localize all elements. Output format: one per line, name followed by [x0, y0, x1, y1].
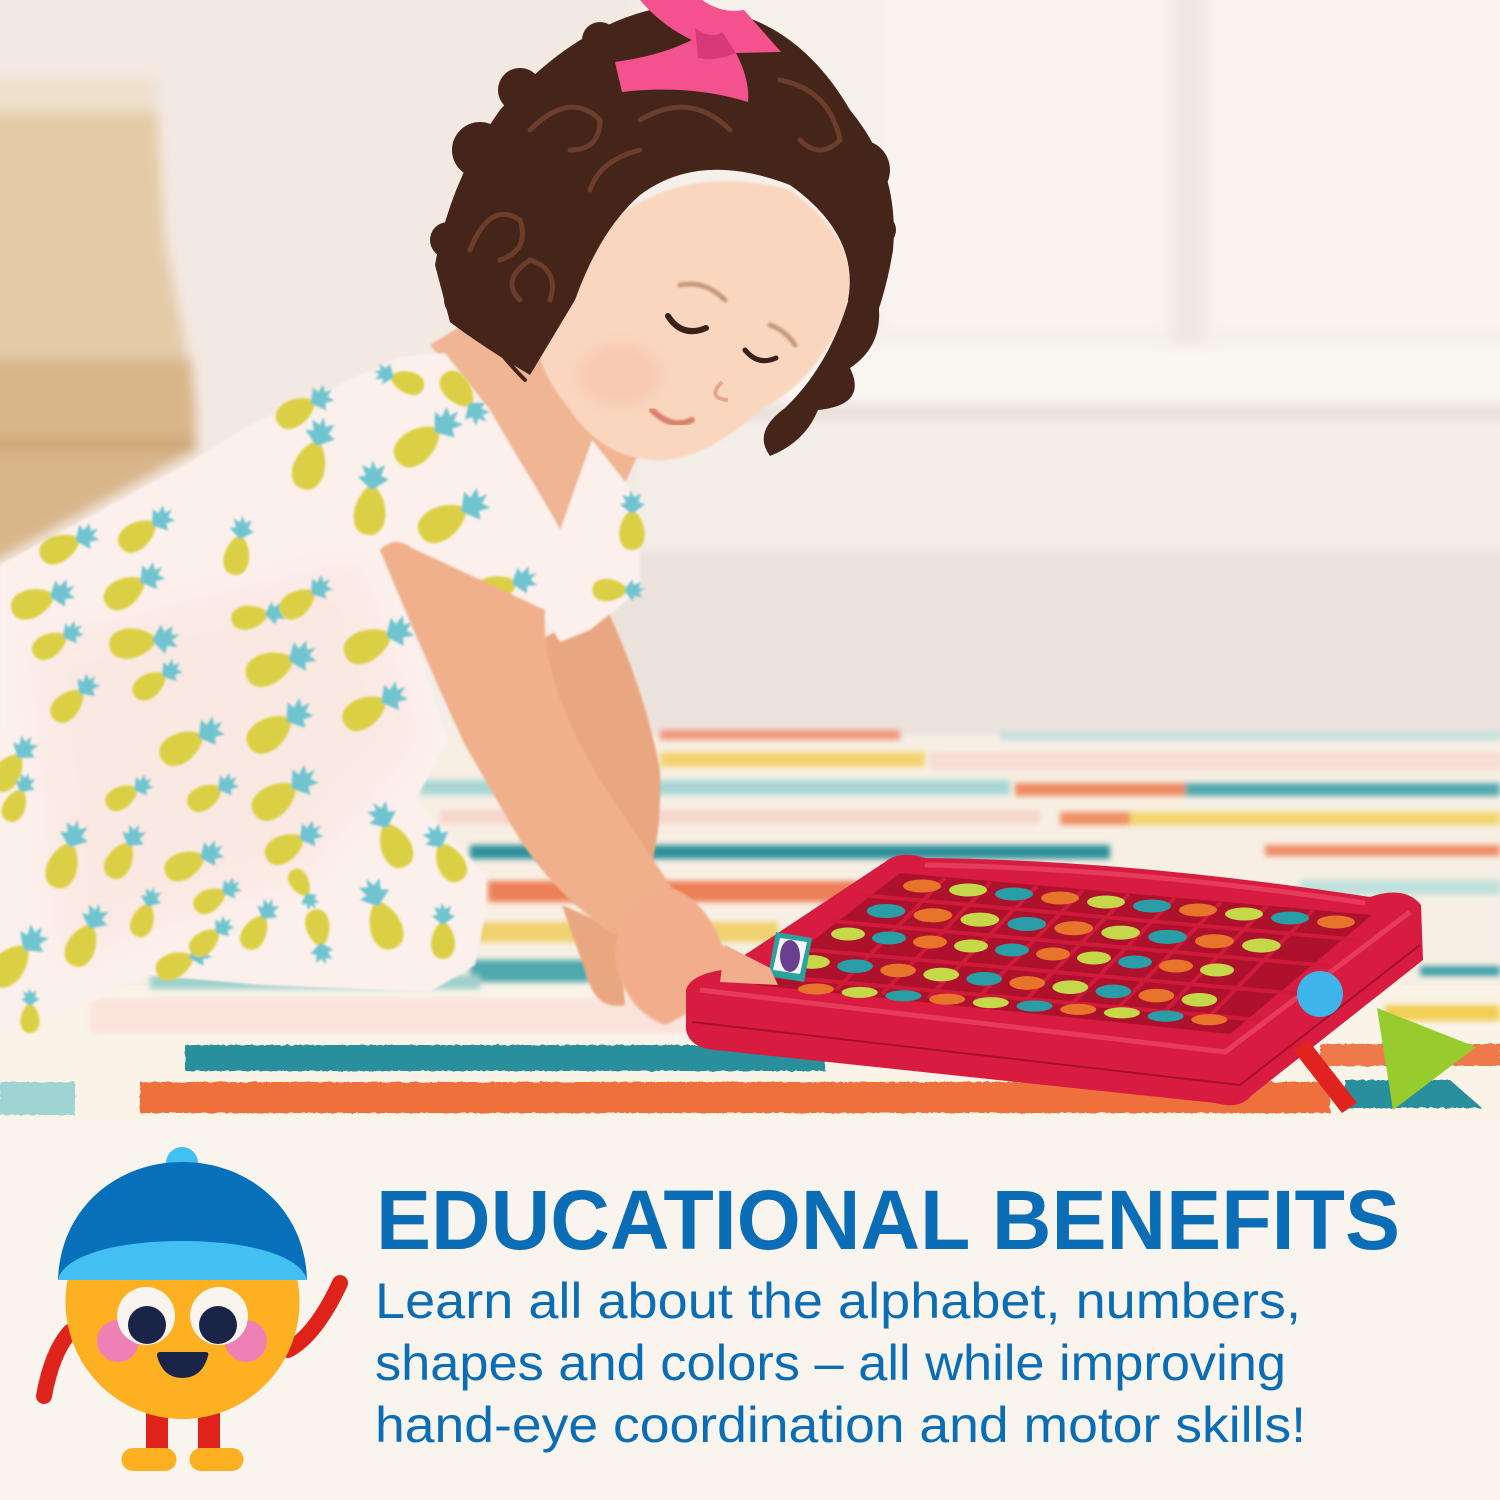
striped rug	[0, 730, 1500, 1120]
hat brim	[58, 1241, 307, 1280]
front arm	[380, 542, 672, 935]
mouth	[157, 1352, 208, 1378]
room background: wall, cabinets and floor	[0, 0, 1500, 1120]
hair curls	[470, 80, 840, 300]
back arm	[540, 605, 660, 1006]
body text: shapes and colors – all while improving	[375, 1335, 1286, 1391]
body text: hand-eye coordination and motor skills!	[375, 1397, 1306, 1453]
hat	[58, 1162, 307, 1280]
hair	[430, 7, 896, 456]
panel: benefits band	[0, 1120, 1500, 1500]
coloured game pieces	[794, 880, 1355, 1025]
shoes	[122, 1448, 244, 1471]
decorative shapes: circle, bar, triangle	[1293, 971, 1476, 1113]
neck and chest skin	[430, 290, 640, 550]
hat pompom	[166, 1147, 198, 1179]
legs	[146, 1405, 220, 1450]
wicker basket	[0, 78, 196, 575]
mascot character	[44, 1147, 340, 1471]
board front seam	[692, 945, 1420, 1085]
right side ringlets	[764, 295, 879, 456]
panel: photo scene	[0, 0, 1500, 1120]
hand	[615, 888, 776, 1025]
left arm	[44, 1332, 70, 1396]
child	[0, 0, 896, 1033]
eyes	[117, 1287, 248, 1345]
board body	[686, 855, 1423, 1105]
cheeks	[97, 1320, 267, 1362]
hair tendril	[490, 340, 525, 380]
body text	[375, 1273, 1306, 1453]
face	[534, 181, 851, 460]
board rim highlights	[700, 865, 1410, 1052]
head	[66, 1185, 300, 1419]
finger over board	[720, 945, 778, 985]
body text: Learn all about the alphabet, numbers,	[375, 1273, 1301, 1329]
board well	[756, 873, 1372, 1034]
right arm	[288, 1283, 340, 1350]
dress	[0, 353, 645, 1033]
pink hair bow	[615, 0, 781, 102]
facial features	[578, 284, 795, 423]
picture card	[768, 932, 812, 982]
well dividers	[770, 878, 1360, 1022]
toy game board	[686, 855, 1423, 1105]
heading: EDUCATIONAL BENEFITS	[376, 1173, 1400, 1267]
pineapple pattern	[0, 360, 645, 1033]
